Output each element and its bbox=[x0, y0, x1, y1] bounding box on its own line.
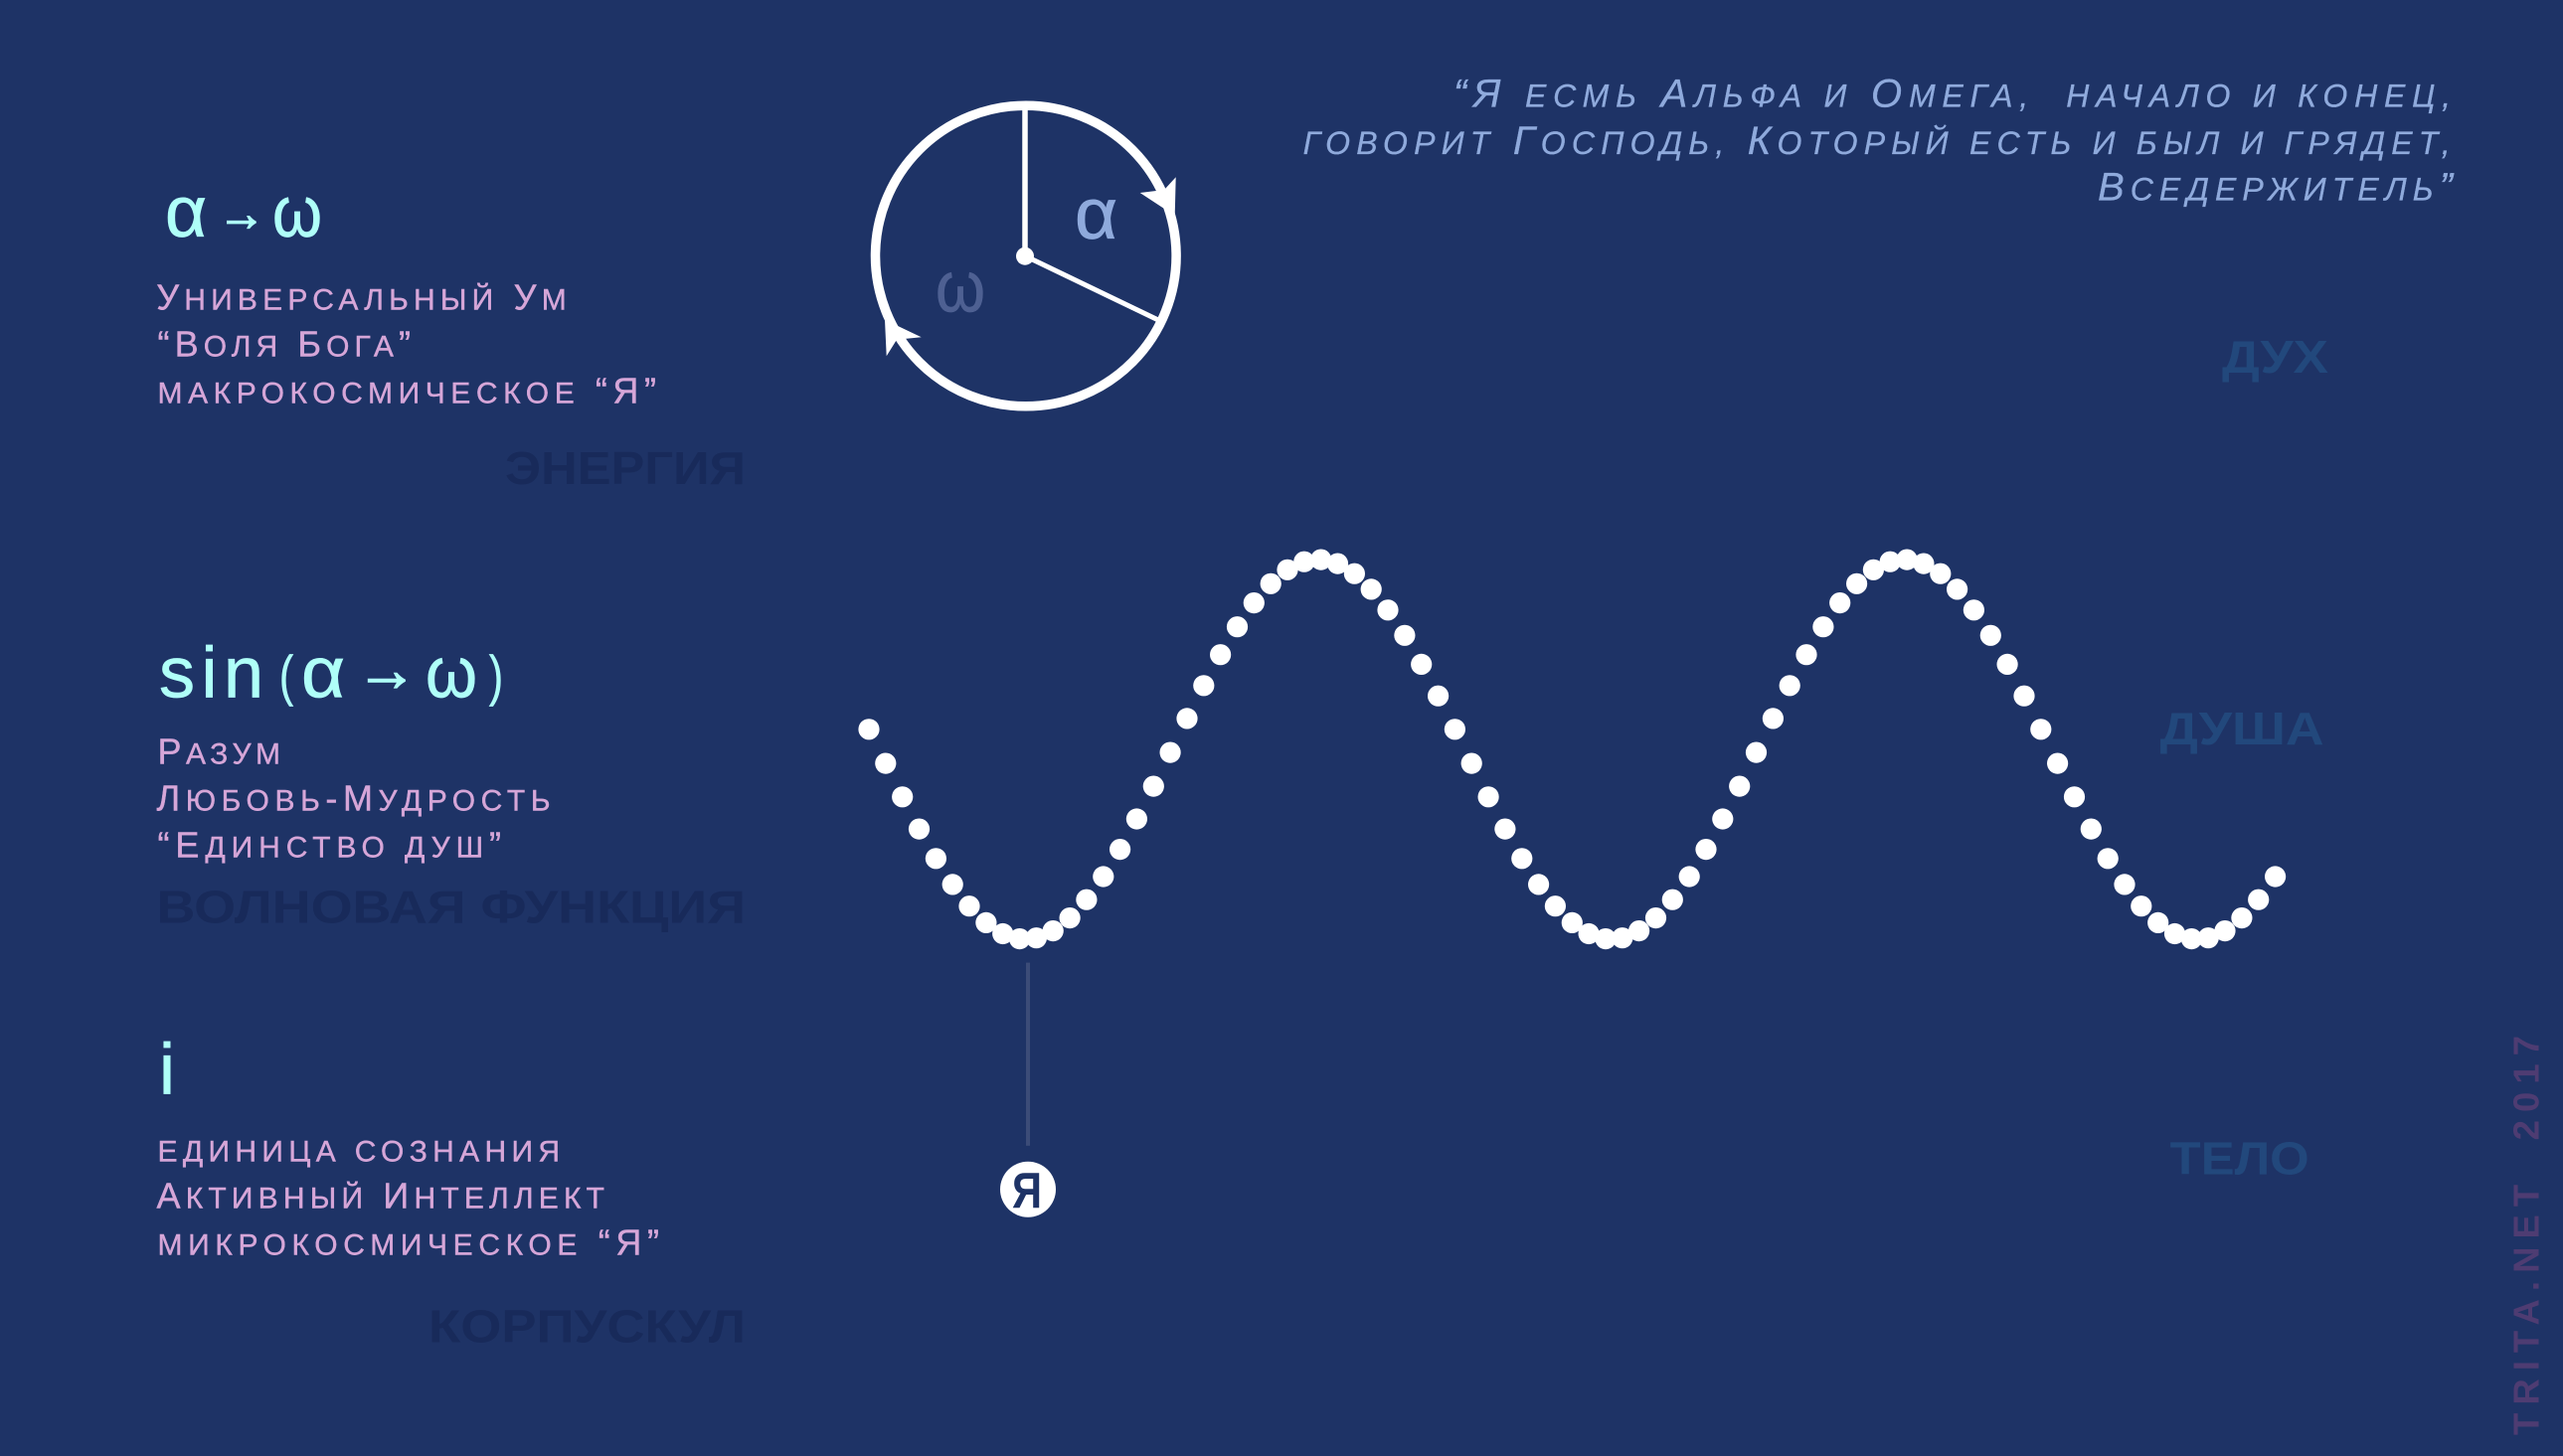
text block: universal mind: “ВОЛЯ БОГА” bbox=[157, 323, 411, 364]
heading: sine formula: ω bbox=[426, 634, 477, 714]
label: corpuscle: КОРПУСКУЛ bbox=[428, 1301, 746, 1353]
text block: unit of consciousness: АКТИВНЫЙ ИНТЕЛЛЕКТ bbox=[157, 1176, 604, 1216]
text block: reason bbox=[157, 730, 551, 865]
label: wave function: ВОЛНОВАЯ ФУНКЦИЯ bbox=[157, 881, 746, 932]
heading: alpha to omega: ω bbox=[272, 173, 322, 252]
panel: reason bbox=[157, 634, 746, 932]
arrowhead: clockwise left bbox=[885, 320, 922, 356]
heading: alpha to omega: → bbox=[218, 186, 265, 242]
heading: sine formula: ) bbox=[489, 644, 503, 707]
quote bbox=[1303, 73, 2455, 210]
label: energy: ЭНЕРГИЯ bbox=[505, 442, 746, 494]
text block: reason: “ЕДИНСТВО ДУШ” bbox=[157, 824, 501, 865]
heading: sine formula: sin bbox=[159, 634, 263, 714]
label: spirit: ДУХ bbox=[2222, 331, 2328, 383]
heading: alpha to omega bbox=[165, 173, 322, 252]
icon: self marker bbox=[1000, 1162, 1056, 1218]
text block: reason: РАЗУМ bbox=[157, 730, 280, 771]
watermark: TRITA.NET 2017 bbox=[2505, 1036, 2546, 1435]
label: alpha: α bbox=[1075, 175, 1117, 254]
panel: universal mind bbox=[156, 173, 746, 494]
quote: ВСЕДЕРЖИТЕЛЬ” bbox=[2098, 166, 2455, 210]
arrowhead: clockwise right bbox=[1140, 177, 1176, 216]
heading: sine formula: α bbox=[301, 634, 345, 714]
heading: i: i bbox=[159, 1031, 175, 1110]
text block: universal mind: УНИВЕРСАЛЬНЫЙ УМ bbox=[156, 277, 567, 318]
heading: sine formula bbox=[159, 634, 503, 714]
heading: sine formula: ( bbox=[279, 644, 293, 707]
quote: “Я ЕСМЬ АЛЬФА И ОМЕГА, НАЧАЛО И КОНЕЦ, bbox=[1453, 73, 2451, 116]
text block: unit of consciousness: ЕДИНИЦА СОЗНАНИЯ bbox=[157, 1135, 560, 1168]
label: omega: ω bbox=[936, 247, 985, 327]
text block: unit of consciousness bbox=[157, 1135, 659, 1262]
text block: universal mind bbox=[156, 277, 656, 411]
label: body: ТЕЛО bbox=[2170, 1133, 2309, 1185]
clock diagram bbox=[876, 105, 1176, 406]
chart: dotted sine wave bbox=[858, 549, 2286, 949]
text block: unit of consciousness: МИКРОКОСМИЧЕСКОЕ “Я” bbox=[157, 1221, 659, 1262]
heading: sine formula: → bbox=[356, 636, 418, 705]
connector: wave to self marker bbox=[1026, 963, 1030, 1146]
quote: ГОВОРИТ ГОСПОДЬ, КОТОРЫЙ ЕСТЬ И БЫЛ И ГРЯДЕТ, bbox=[1303, 119, 2451, 163]
ring bbox=[876, 105, 1176, 406]
label: soul: ДУША bbox=[2160, 703, 2324, 754]
panel: unit of consciousness bbox=[157, 1031, 746, 1353]
heading: alpha to omega: α bbox=[165, 173, 207, 252]
clock hands bbox=[1025, 105, 1158, 320]
icon: self marker: Я bbox=[1012, 1163, 1042, 1218]
text block: universal mind: МАКРОКОСМИЧЕСКОЕ “Я” bbox=[157, 371, 656, 411]
text block: reason: ЛЮБОВЬ-МУДРОСТЬ bbox=[157, 778, 551, 819]
center dot bbox=[1016, 247, 1034, 265]
